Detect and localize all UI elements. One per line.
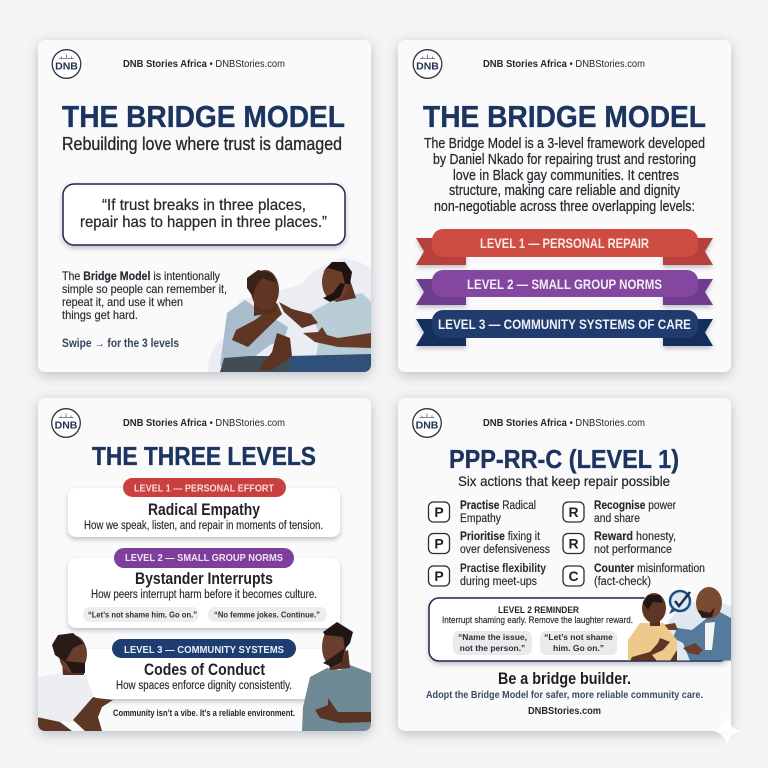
chip: name the issue: not the person.” [460,643,525,653]
header: brand line: DNB Stories Africa • DNBStories.com [123,59,285,70]
action: P prioritise fixing: Prioritise fixing it [460,531,541,543]
icon: check speech bubble [669,591,690,614]
text block: definition: The Bridge Model is a 3-level framework developed [424,135,705,152]
description: How spaces enforce dignity consistently. [116,680,292,692]
text block: definition: structure, making care reliable and dignity [449,182,680,199]
panel: three levels card [37,398,371,731]
description: How peers interrupt harm before it becomes culture. [91,589,317,601]
heading: radical empathy: Radical Empathy [148,501,261,519]
tagline: Community isn’t a vibe. It’s a reliable environment. [113,708,295,718]
man: yellow shirt [628,593,677,661]
action: P practise radical empathy: Empathy [460,513,501,525]
pill: level 3 [112,639,296,658]
callout: quote: repair has to happen in three places.” [80,214,327,231]
closing text: Adopt the Bridge Model for safer, more reliable community care. [426,689,703,701]
pill: level 3: LEVEL 3 — COMMUNITY SYSTEMS [124,644,284,656]
pill: level 2: LEVEL 2 — SMALL GROUP NORMS [125,552,283,564]
action: P practise flexibility: Practise flexibility [460,563,547,575]
action: P prioritise fixing: over defensiveness [460,544,550,556]
ribbon: level 1 [416,229,713,265]
chip: example 1 [83,607,199,622]
panel: PPP-RR-C card [398,398,731,731]
action: R reward honesty [563,531,676,556]
chip: name the issue: “Name the issue, [458,632,527,642]
pill: level 1: LEVEL 1 — PERSONAL EFFORT [134,482,274,494]
action: R reward honesty: R [568,536,579,552]
ribbon: level 1: LEVEL 1 — PERSONAL REPAIR [480,235,649,251]
chip: name the issue [453,631,532,655]
action: R recognise power: Recognise power [594,500,676,512]
illustration: left man [37,633,113,731]
text block: description: simple so people can remember it, [62,282,227,296]
panel: definition card [398,40,731,372]
text block: definition: non-negotiable across three overlapping levels: [434,198,695,215]
heading: codes of conduct: Codes of Conduct [144,661,265,679]
website: DNBStories.com [528,706,601,717]
chip: example 1: “Let’s not shame him. Go on.” [88,610,197,620]
action: P practise radical empathy [428,500,536,525]
header: brand line: DNB Stories Africa • DNBStories.com [483,59,645,70]
heading: bystander interrupts: Bystander Interrupts [135,570,273,588]
title: THE BRIDGE MODEL [62,99,345,134]
chip: let's not shame him [540,631,617,655]
level 2 block [68,548,340,628]
action: P practise flexibility: during meet-ups [460,576,537,588]
left man [220,270,292,372]
text block: description: repeat it, and use it when [62,295,183,309]
text block: description: The Bridge Model is intentionally [62,269,220,283]
illustration: two men in conversation [208,258,371,372]
action: R reward honesty: Reward honesty, [594,531,676,543]
level 3 block [68,639,340,699]
callout: level 2 reminder: LEVEL 2 REMINDER [498,605,579,616]
logo: DNB: DNB [416,60,439,72]
logo: DNB [413,409,441,437]
chip: let's not shame him: him. Go on.” [553,643,604,653]
action: P practise radical empathy: P [434,504,444,520]
closing heading: Be a bridge builder. [498,670,631,688]
chip: let's not shame him: “Let’s not shame [544,632,613,642]
text block: description [62,269,227,322]
action: R recognise power: and share [594,513,640,525]
title: THE BRIDGE MODEL [423,99,706,134]
level 1 block [68,478,340,537]
text block: definition: love in Black gay communities. It centres [453,167,679,184]
chip: example 2 [208,607,327,622]
man: blue jacket [663,587,731,661]
action: P practise radical empathy: Practise Radical [460,500,536,512]
cta: swipe: Swipe → for the 3 levels [62,338,179,350]
title: PPP-RR-C (LEVEL 1) [449,444,679,474]
right man [279,262,371,372]
pill: level 2 [114,548,294,568]
action: R recognise power [563,500,676,525]
action: R recognise power: R [568,504,579,520]
action: C counter misinformation: (fact-check) [594,576,651,588]
callout: quote [63,184,345,245]
action: R reward honesty: not performance [594,544,672,556]
illustration: two men with check badge [628,587,731,661]
action: P practise flexibility: P [434,568,444,584]
logo: DNB: DNB [55,60,78,72]
description: How we speak, listen, and repair in moments of tension. [84,520,323,532]
title: THE THREE LEVELS [92,441,316,471]
ribbon: level 2: LEVEL 2 — SMALL GROUP NORMS [467,276,662,292]
action: C counter misinformation: C [568,568,579,584]
icon: sparkle [712,716,742,746]
logo: DNB: DNB [416,420,439,432]
logo: DNB [413,50,442,78]
text block: definition [424,135,705,215]
ribbon: level 3: LEVEL 3 — COMMUNITY SYSTEMS OF CARE [438,316,691,332]
ribbon: level 3 [416,310,713,346]
action: P practise flexibility [428,563,547,588]
logo: DNB: DNB [55,420,78,432]
callout: quote: “If trust breaks in three places, [102,197,306,214]
illustration: right man [302,622,371,731]
logo: DNB [52,409,80,437]
header: brand line: DNB Stories Africa • DNBStories.com [483,418,645,429]
ribbon: level 2 [416,270,713,305]
action: P prioritise fixing: P [434,536,444,552]
text block: description: things get hard. [62,308,138,322]
action: C counter misinformation [563,563,705,588]
header: brand line: DNB Stories Africa • DNBStories.com [123,418,285,429]
chip: example 2: “No femme jokes. Continue.” [214,610,320,620]
subtitle: Six actions that keep repair possible [458,473,670,489]
callout: level 2 reminder: Interrupt shaming early. Remove the laughter reward. [442,615,633,625]
action: P prioritise fixing [428,531,550,556]
callout: level 2 reminder [429,598,729,661]
subtitle: Rebuilding love where trust is damaged [62,134,342,154]
panel: intro card [38,40,371,372]
pill: level 1 [123,478,286,497]
logo: DNB [52,50,81,78]
text block: definition: by Daniel Nkado for repairing trust and restoring [433,151,696,168]
action: C counter misinformation: Counter misinformation [594,563,705,575]
